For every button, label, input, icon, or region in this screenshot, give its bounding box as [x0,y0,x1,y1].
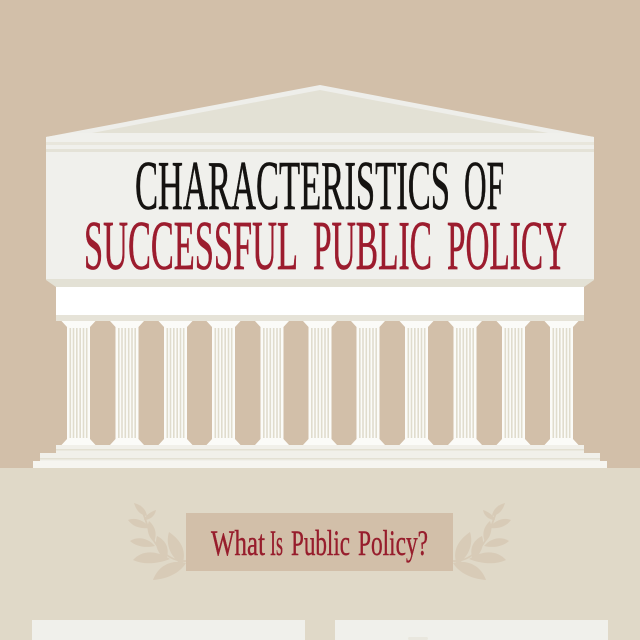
panel: left card top [32,620,305,640]
heading banner [186,513,453,571]
temple steps [33,445,607,468]
heading banner: What [211,523,265,563]
panel: right card top [335,620,608,640]
heading banner: Policy? [358,523,428,563]
title: SUCCESSFUL [84,208,298,285]
title [84,148,567,285]
laurel left [128,503,186,580]
pediment [46,85,594,137]
title: PUBLIC [313,208,432,285]
lintel [56,287,584,321]
entablature [46,133,594,287]
background: lower beige [0,468,640,640]
colonnade [62,321,578,445]
heading banner: Public [291,523,350,563]
title: OF [464,148,504,225]
laurel right [453,503,511,580]
icon: right card partial [408,637,428,640]
temple building [33,85,607,468]
background: upper tan [0,0,640,468]
heading banner: Is [270,523,283,563]
